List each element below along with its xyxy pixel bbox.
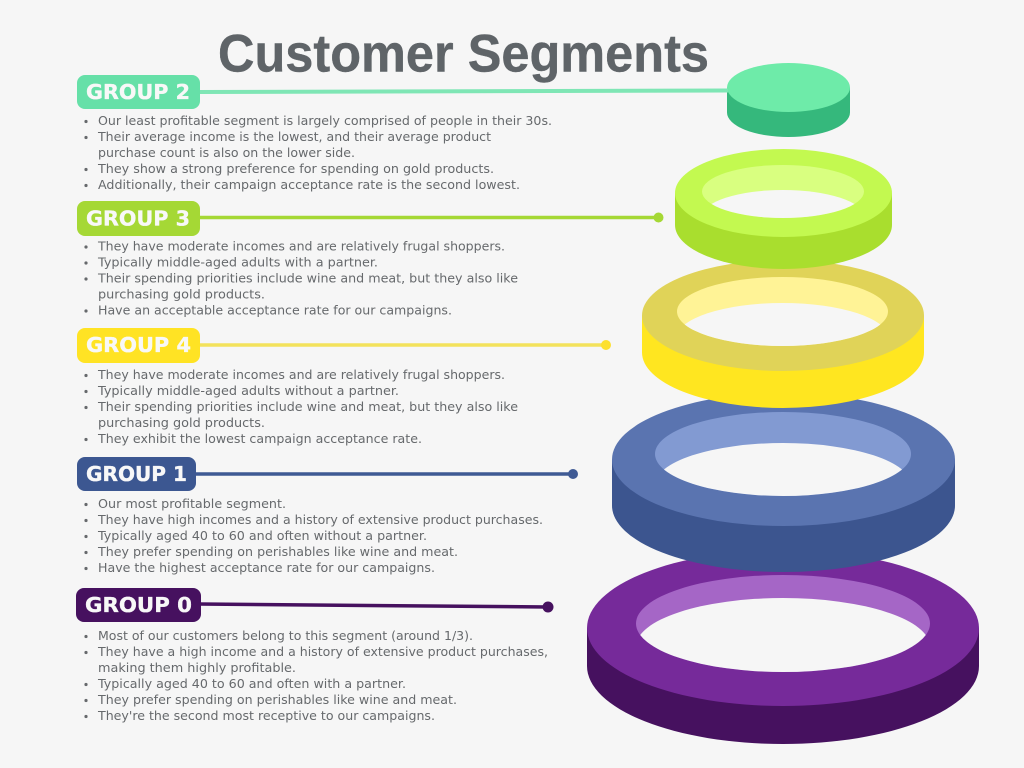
connector: group 4 bbox=[198, 340, 611, 350]
text: group 3 bullets bbox=[84, 240, 518, 318]
text: group 3 bullets: Their spending priorities include wine and meat, but they also like bbox=[97, 272, 518, 286]
icon: group 1 ring bbox=[612, 393, 955, 572]
text: group 0 bullets: They prefer spending on perishables like wine and meat. bbox=[97, 693, 457, 707]
badge: group 0 bbox=[76, 588, 201, 622]
text: group 1 bullets: Have the highest acceptance rate for our campaigns. bbox=[98, 561, 435, 575]
text: group 4 bullets: purchasing gold products. bbox=[98, 416, 265, 430]
icon: group 3 ring bbox=[675, 149, 892, 269]
badge: group 4 bbox=[77, 328, 200, 363]
text: group 0 bullets bbox=[84, 629, 548, 723]
badge: group 2: GROUP 2 bbox=[86, 80, 190, 104]
badge: group 1: GROUP 1 bbox=[86, 462, 187, 486]
text: group 0 bullets: Typically aged 40 to 60 and often with a partner. bbox=[97, 677, 406, 691]
text: group 2 bullets: Their average income is the lowest, and their average product bbox=[97, 130, 491, 144]
panel: group 3 bbox=[77, 201, 664, 318]
text: group 2 bullets: Additionally, their campaign acceptance rate is the second lowest. bbox=[98, 178, 520, 192]
panel: group 1 bbox=[77, 457, 578, 575]
text: group 2 bullets: purchase count is also on the lower side. bbox=[98, 146, 355, 160]
text: group 2 bullets: Our least profitable segment is largely comprised of people in their 30s. bbox=[98, 114, 552, 128]
text: group 2 bullets: They show a strong preference for spending on gold products. bbox=[97, 162, 494, 176]
icon: group 4 ring bbox=[642, 260, 924, 408]
panel: group 4 bbox=[77, 328, 611, 446]
badge: group 3: GROUP 3 bbox=[86, 206, 190, 230]
text: group 3 bullets: purchasing gold products. bbox=[98, 288, 265, 302]
text: group 3 bullets: Typically middle-aged adults with a partner. bbox=[97, 256, 378, 270]
connector: group 3 bbox=[198, 212, 664, 222]
text: group 0 bullets: They have a high income and a history of extensive product purchases, bbox=[97, 645, 548, 659]
icon: group 0 ring bbox=[587, 550, 979, 744]
text: group 4 bullets: They exhibit the lowest campaign acceptance rate. bbox=[97, 432, 422, 446]
text: group 3 bullets: Have an acceptable acceptance rate for our campaigns. bbox=[98, 304, 452, 318]
title: Customer Segments bbox=[218, 24, 709, 84]
connector: group 2 bbox=[198, 90, 728, 92]
text: group 1 bullets: Typically aged 40 to 60 and often without a partner. bbox=[97, 529, 427, 543]
text: group 3 bullets: They have moderate incomes and are relatively frugal shoppers. bbox=[97, 240, 505, 254]
text: group 0 bullets: Most of our customers belong to this segment (around 1/3). bbox=[98, 629, 473, 643]
badge: group 4: GROUP 4 bbox=[86, 333, 191, 357]
badge: group 1 bbox=[77, 457, 196, 491]
text: group 4 bullets bbox=[84, 368, 518, 446]
badge: group 0: GROUP 0 bbox=[85, 593, 192, 617]
text: group 1 bullets: They have high incomes and a history of extensive product purchases. bbox=[97, 513, 543, 527]
text: group 2 bullets bbox=[84, 114, 552, 192]
badge: group 2 bbox=[77, 75, 200, 109]
text: group 1 bullets: They prefer spending on perishables like wine and meat. bbox=[97, 545, 458, 559]
text: group 1 bullets: Our most profitable segment. bbox=[98, 497, 286, 511]
panel: group 2 bbox=[77, 75, 728, 192]
text: group 0 bullets: They're the second most receptive to our campaigns. bbox=[97, 709, 435, 723]
badge: group 3 bbox=[77, 201, 200, 236]
text: group 0 bullets: making them highly profitable. bbox=[98, 661, 296, 675]
connector: group 1 bbox=[194, 469, 578, 479]
text: group 4 bullets: Typically middle-aged adults without a partner. bbox=[97, 384, 399, 398]
panel: group 0 bbox=[76, 588, 554, 723]
text: group 1 bullets bbox=[84, 497, 543, 575]
text: group 4 bullets: Their spending priorities include wine and meat, but they also like bbox=[97, 400, 518, 414]
text: group 4 bullets: They have moderate incomes and are relatively frugal shoppers. bbox=[97, 368, 505, 382]
icon: group 2 disc bbox=[727, 63, 850, 137]
connector: group 0 bbox=[198, 602, 554, 612]
